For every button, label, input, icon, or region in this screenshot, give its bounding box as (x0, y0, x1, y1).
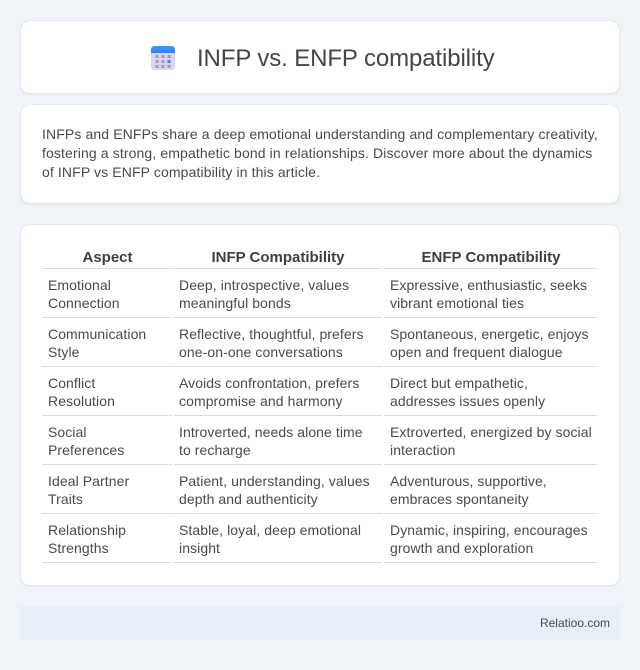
title text: INFP vs. ENFP compatibility (197, 45, 495, 72)
row: Conflict Resolution (48, 375, 546, 409)
comparison table: Conflict (48, 375, 95, 391)
comparison table: to recharge (179, 442, 251, 458)
comparison table: Patient, understanding, values (179, 473, 370, 489)
comparison table: Direct but empathetic, (390, 375, 528, 391)
comparison table: Stable, loyal, deep emotional (179, 522, 361, 538)
comparison table: Dynamic, inspiring, encourages (390, 522, 588, 538)
footer bar (20, 606, 620, 640)
comparison table: addresses issues openly (390, 393, 545, 409)
comparison table: Emotional (48, 277, 111, 293)
row: Ideal Partner Traits (48, 473, 547, 507)
intro paragraph: INFPs and ENFPs share a deep emotional understanding and complementary creativity, (42, 126, 598, 142)
comparison table: Resolution (48, 393, 115, 409)
comparison table: Connection (48, 295, 120, 311)
panel: comparison table (20, 224, 620, 586)
intro paragraph (42, 126, 598, 180)
comparison table: open and frequent dialogue (390, 344, 563, 360)
comparison table: Style (48, 344, 80, 360)
row: Emotional Connection (48, 277, 587, 311)
comparison table: insight (179, 540, 220, 556)
comparison table: Introverted, needs alone time (179, 424, 363, 440)
intro paragraph: fostering a strong, empathetic bond in relationships. Discover more about the dynamics (42, 145, 592, 161)
comparison table: Communication (48, 326, 146, 342)
row: Social Preferences (48, 424, 592, 458)
comparison table: depth and authenticity (179, 491, 318, 507)
intro paragraph: of INFP vs ENFP compatibility in this article. (42, 164, 320, 180)
footer text: Relatioo.com: Relatioo.com (540, 616, 610, 630)
comparison table: growth and exploration (390, 540, 533, 556)
icon: calendar (151, 46, 175, 70)
row: Communication Style (48, 326, 589, 360)
comparison table (42, 249, 597, 563)
header: INFP Compatibility: INFP Compatibility (211, 249, 345, 266)
comparison table: Expressive, enthusiastic, seeks (390, 277, 587, 293)
comparison table: interaction (390, 442, 455, 458)
comparison table: Reflective, thoughtful, prefers (179, 326, 364, 342)
comparison table: Spontaneous, energetic, enjoys (390, 326, 589, 342)
comparison table: compromise and harmony (179, 393, 343, 409)
panel: introduction (20, 104, 620, 204)
comparison table: Ideal Partner (48, 473, 129, 489)
header: Aspect: Aspect (82, 249, 133, 266)
comparison table: Deep, introspective, values (179, 277, 349, 293)
comparison table: one-on-one conversations (179, 344, 343, 360)
comparison table: Social (48, 424, 87, 440)
title card (20, 20, 620, 94)
comparison table: Preferences (48, 442, 124, 458)
comparison table: Traits (48, 491, 83, 507)
header: ENFP Compatibility: ENFP Compatibility (422, 249, 560, 266)
comparison table: vibrant emotional ties (390, 295, 524, 311)
title heading (151, 45, 495, 72)
comparison table: Extroverted, energized by social (390, 424, 592, 440)
comparison table: Strengths (48, 540, 109, 556)
row: Relationship Strengths (48, 522, 588, 556)
comparison table: Relationship (48, 522, 126, 538)
comparison table: Adventurous, supportive, (390, 473, 547, 489)
comparison table: embraces spontaneity (390, 491, 529, 507)
comparison table: Avoids confrontation, prefers (179, 375, 359, 391)
comparison table: meaningful bonds (179, 295, 291, 311)
